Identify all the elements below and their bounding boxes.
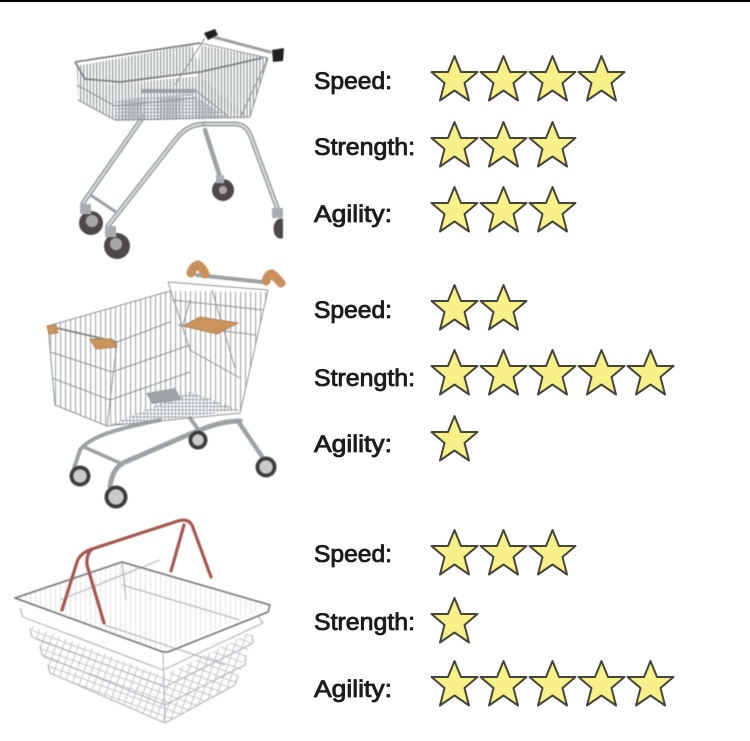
cart 1 wheels: [79, 175, 283, 259]
panel: hand basket: [15, 520, 270, 723]
basket handles: [62, 520, 211, 623]
Strength row: Strength:: [314, 609, 415, 636]
cart 1 basket: [75, 29, 284, 121]
cart 1 legs: [83, 117, 278, 226]
Speed row: Speed:: [314, 297, 392, 324]
Strength row: Strength:: [314, 134, 415, 161]
Speed row: [314, 530, 576, 574]
Agility row: Agility:: [314, 431, 392, 458]
Speed row: Speed:: [314, 541, 392, 568]
Strength row: Strength:: [314, 365, 415, 392]
Agility row: Agility:: [314, 201, 392, 228]
Strength row: [314, 350, 674, 394]
cart 2 chassis: [74, 418, 263, 486]
cart 2 wheels: [72, 432, 274, 506]
cart 2 basket: [47, 265, 281, 426]
Strength row: [314, 598, 478, 642]
top black bar: [0, 0, 750, 2]
basket body: [15, 560, 270, 723]
Agility row: [314, 416, 478, 460]
Agility row: Agility:: [314, 676, 392, 703]
Strength row: [314, 122, 576, 166]
panel: large shopping cart: [47, 265, 281, 506]
Agility row: [314, 187, 576, 232]
panel: stats for hand basket: [314, 530, 674, 706]
panel: stats for large cart: [314, 285, 674, 460]
Agility row: [314, 661, 674, 706]
Speed row: Speed:: [314, 68, 392, 95]
panel: stats for small cart: [314, 56, 624, 232]
panel: small shopping cart: [75, 29, 284, 259]
Speed row: [314, 56, 624, 100]
Speed row: [314, 285, 526, 330]
